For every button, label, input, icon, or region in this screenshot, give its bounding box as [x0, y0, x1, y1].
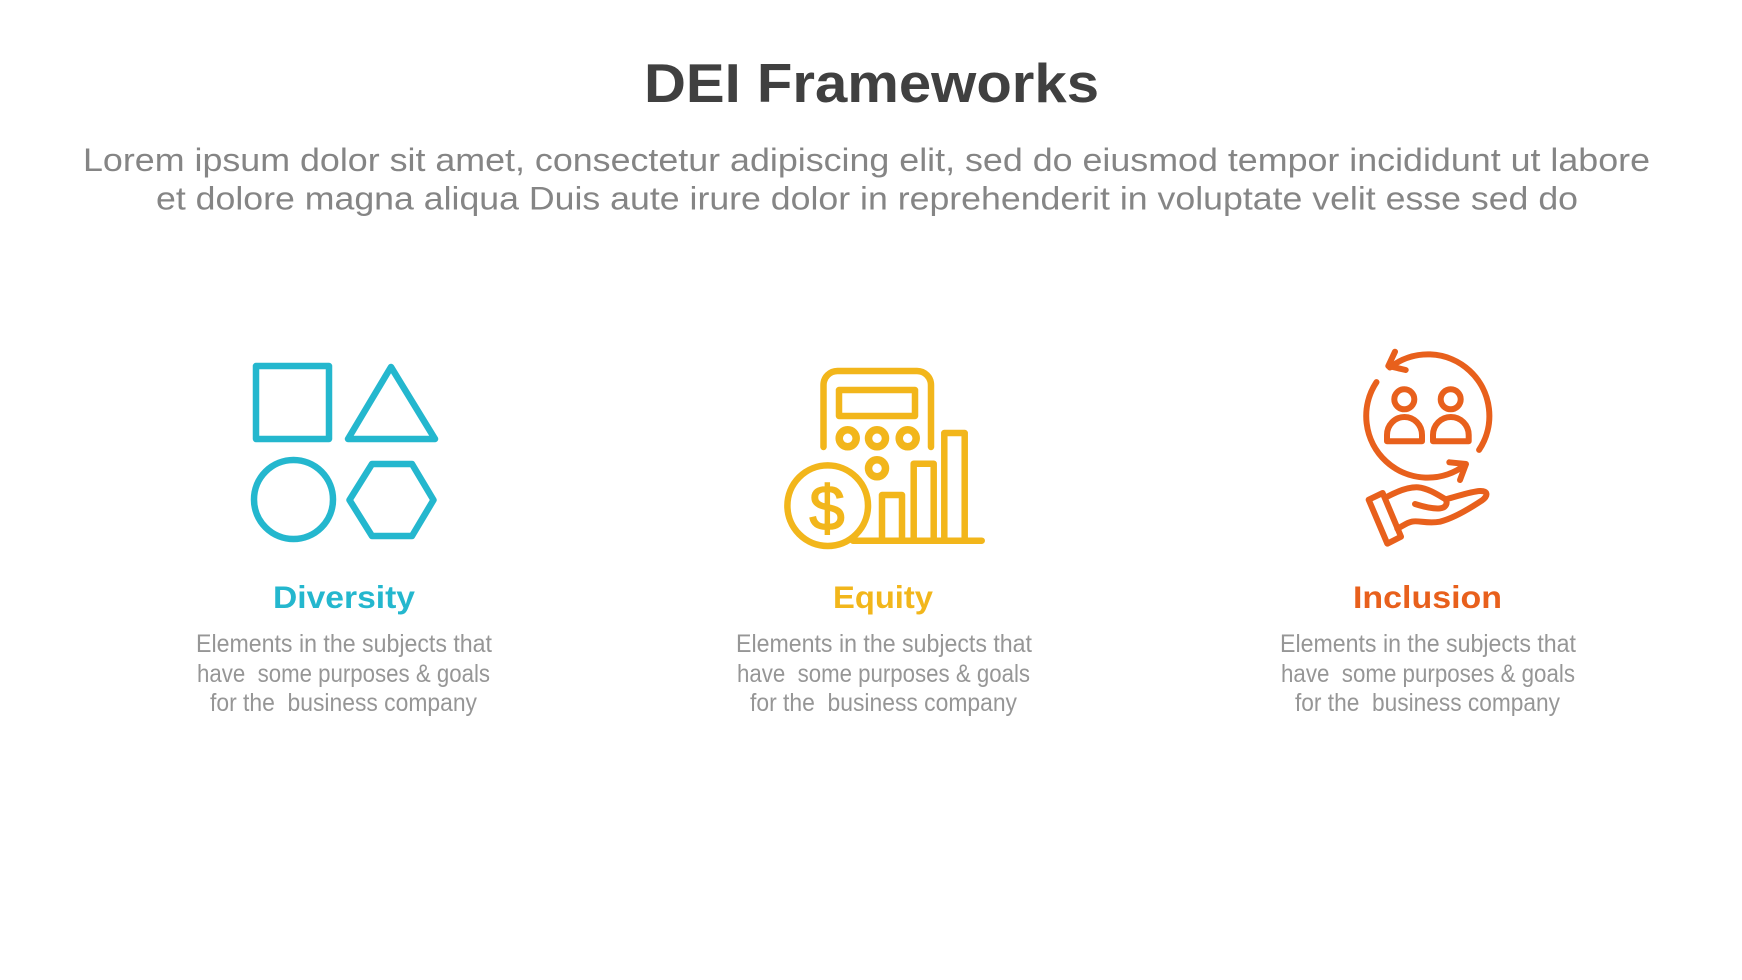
icon: calculator, coin and bar chart	[787, 371, 982, 546]
text: inclusion description: for the business company	[1295, 689, 1560, 717]
heading: diversity: Diversity	[273, 579, 416, 615]
subtitle text block: et dolore magna aliqua Duis aute irure dolor in reprehenderit in voluptate velit esse sed do	[156, 180, 1578, 216]
text: equity description: Elements in the subjects that	[736, 630, 1032, 658]
panel: diversity	[196, 366, 492, 717]
subtitle text block: Lorem ipsum dolor sit amet, consectetur adipiscing elit, sed do eiusmod tempor incididunt ut labore	[83, 142, 1650, 178]
text: inclusion description	[1280, 630, 1576, 717]
icon: four shapes	[254, 366, 435, 539]
text: equity description	[736, 630, 1032, 717]
text: equity description: for the business company	[750, 689, 1017, 717]
text: inclusion description: have some purposes & goals	[1281, 660, 1575, 688]
icon: dollar sign: $	[809, 474, 845, 544]
panel: equity	[736, 371, 1032, 717]
text: diversity description: have some purposes & goals	[197, 660, 490, 688]
text: diversity description	[196, 630, 492, 717]
heading: inclusion: Inclusion	[1353, 579, 1502, 615]
title: DEI Frameworks	[644, 52, 1099, 114]
text: equity description: have some purposes & goals	[737, 660, 1030, 688]
text: diversity description: Elements in the subjects that	[196, 630, 492, 658]
text: inclusion description: Elements in the subjects that	[1280, 630, 1576, 658]
subtitle text block	[83, 142, 1650, 216]
text: diversity description: for the business company	[210, 689, 477, 717]
icon: people in cycle arrows above hand	[1366, 352, 1489, 544]
heading: equity: Equity	[833, 579, 933, 615]
panel: inclusion	[1280, 352, 1576, 717]
